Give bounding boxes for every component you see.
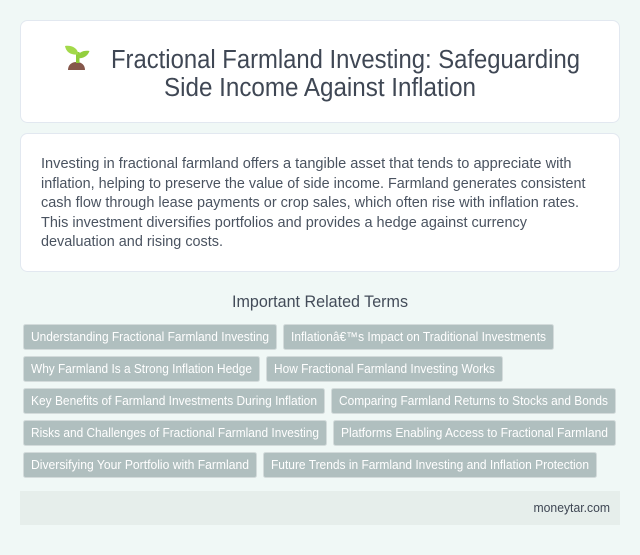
tag bbox=[334, 420, 616, 446]
description text: devaluation and rising costs. bbox=[41, 233, 223, 250]
panel: title card bbox=[20, 20, 620, 122]
tag: Future Trends in Farmland Investing and Inflation Protection bbox=[271, 458, 589, 472]
description text: Investing in fractional farmland offers a tangible asset that tends to appreciate with bbox=[41, 155, 572, 172]
tag bbox=[24, 452, 256, 478]
tag bbox=[24, 324, 276, 350]
heading: related terms: Important Related Terms bbox=[232, 293, 408, 311]
tag: How Fractional Farmland Investing Works bbox=[274, 362, 495, 376]
description text bbox=[41, 155, 586, 250]
tag bbox=[24, 420, 326, 446]
title: Side Income Against Inflation bbox=[164, 74, 476, 102]
tag: Risks and Challenges of Fractional Farmland Investing bbox=[31, 426, 319, 440]
description text: This investment diversifies portfolios and provides a hedge against currency bbox=[41, 214, 527, 231]
footer bbox=[20, 491, 620, 525]
tag: Why Farmland Is a Strong Inflation Hedge bbox=[31, 362, 252, 376]
tag bbox=[264, 452, 596, 478]
tag bbox=[24, 356, 260, 382]
tag: Platforms Enabling Access to Fractional Farmland bbox=[341, 426, 608, 440]
tag bbox=[332, 388, 616, 414]
footer source: moneytar.com bbox=[534, 501, 610, 515]
tag bbox=[284, 324, 554, 350]
tag bbox=[24, 388, 324, 414]
panel: description bbox=[20, 134, 620, 272]
tag: Diversifying Your Portfolio with Farmland bbox=[31, 458, 249, 472]
tag bbox=[266, 356, 502, 382]
description text: cash flow through lease payments or crop sales, which often rise with inflation rates. bbox=[41, 194, 579, 211]
tag: Key Benefits of Farmland Investments During Inflation bbox=[31, 394, 317, 408]
description text: inflation, helping to preserve the value of side income. Farmland generates consistent bbox=[41, 175, 586, 192]
title bbox=[111, 46, 580, 102]
tag: Understanding Fractional Farmland Investing bbox=[31, 330, 269, 344]
related terms tags bbox=[24, 324, 616, 478]
tag: Comparing Farmland Returns to Stocks and Bonds bbox=[339, 394, 608, 408]
title: Fractional Farmland Investing: Safeguarding bbox=[111, 46, 580, 74]
icon: seedling bbox=[65, 46, 90, 70]
tag: Inflationâ€™s Impact on Traditional Investments bbox=[291, 330, 546, 344]
